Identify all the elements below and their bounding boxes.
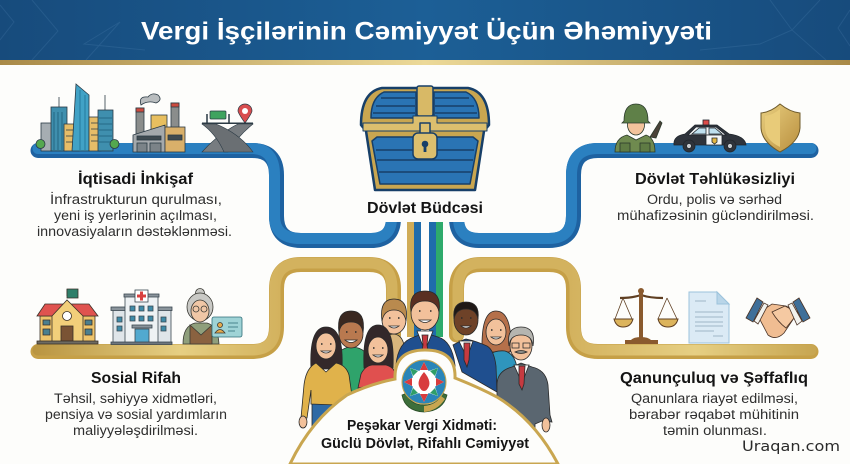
title: Vergi İşçilərinin Cəmiyyət Üçün Əhəmiyyəti bbox=[141, 16, 712, 46]
block: state security: mühafizəsinin gücləndirilməsi. bbox=[617, 208, 814, 223]
block: social welfare: Sosial Rifah bbox=[91, 370, 181, 387]
centre stripes bbox=[407, 222, 443, 337]
icon: document bbox=[689, 292, 729, 343]
header banner bbox=[0, 0, 850, 65]
block: rule of law and transparency bbox=[620, 370, 808, 438]
icon: shield bbox=[761, 104, 800, 152]
block: rule of law and transparency: təmin olunması. bbox=[663, 423, 767, 438]
block: state security: Dövlət Təhlükəsizliyi bbox=[635, 171, 795, 188]
block: economic development: İqtisadi İnkişaf bbox=[78, 171, 194, 188]
block: state security: Ordu, polis və sərhəd bbox=[647, 192, 782, 207]
icon: treasure chest bbox=[361, 86, 489, 190]
pipe: gold left bbox=[38, 263, 394, 352]
block: rule of law and transparency: Qanunlara riayət edilməsi, bbox=[631, 391, 798, 406]
watermark: Uraqan.com bbox=[742, 439, 840, 455]
icon: city buildings bbox=[36, 84, 119, 151]
icon: crossing roads and pin bbox=[202, 104, 253, 152]
person: woman in yellow bbox=[299, 327, 353, 440]
block: rule of law and transparency: Qanunçuluq və Şəffaflıq bbox=[620, 370, 808, 387]
block: economic development: innovasiyaların dəstəklənməsi. bbox=[37, 224, 232, 239]
block: rule of law and transparency: bərabər rəqabət mühitinin bbox=[629, 407, 799, 422]
person: man in blue suit with dark skin bbox=[453, 302, 497, 392]
person: woman with auburn hair, back row bbox=[482, 311, 517, 392]
block: economic development: yeni iş yerlərinin açılması, bbox=[54, 208, 217, 223]
panel: arch with emblem bbox=[290, 350, 558, 464]
block: economic development bbox=[37, 171, 232, 239]
slogan: Güclü Dövlət, Rifahlı Cəmiyyət bbox=[321, 436, 529, 452]
icon: soldier bbox=[615, 104, 662, 152]
icon: elderly woman with pension card bbox=[183, 288, 242, 344]
block: state security bbox=[617, 171, 814, 223]
icon: Azerbaijan emblem bbox=[402, 360, 447, 412]
label: state budget: Dövlət Büdcəsi bbox=[367, 200, 483, 217]
pipe: blue right bbox=[456, 148, 811, 240]
block: social welfare: pensiya və sosial yardımların bbox=[45, 407, 227, 422]
pipe: gold right bbox=[456, 263, 811, 352]
icon: factory bbox=[133, 94, 185, 152]
icon: hospital bbox=[111, 290, 172, 344]
icon: handshake bbox=[746, 298, 810, 338]
person: older man in grey suit bbox=[497, 327, 552, 436]
icon: scales of justice bbox=[614, 288, 678, 344]
person: man in green, back row bbox=[338, 311, 365, 400]
slogan: Peşəkar Vergi Xidməti: bbox=[347, 418, 497, 434]
slogan bbox=[321, 418, 529, 452]
person: man with tan hair, back row bbox=[380, 299, 406, 375]
block: social welfare: Təhsil, səhiyyə xidmətləri, bbox=[54, 391, 217, 406]
block: social welfare: maliyyələşdirilməsi. bbox=[73, 423, 198, 438]
person: central man in blue suit bbox=[396, 291, 455, 395]
block: social welfare bbox=[45, 370, 227, 438]
person: woman in red bbox=[358, 325, 396, 392]
group of people bbox=[299, 291, 552, 440]
pipe: blue left bbox=[38, 148, 394, 240]
block: economic development: İnfrastrukturun qurulması, bbox=[50, 192, 222, 207]
icon: school bbox=[37, 289, 98, 344]
icon: police car bbox=[674, 120, 746, 152]
